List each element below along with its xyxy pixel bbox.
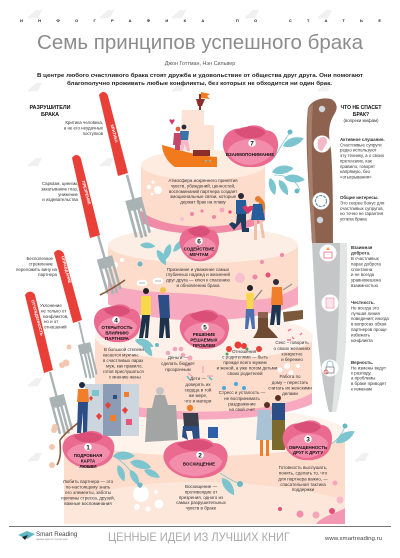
text: acceptance: держат брак на плаву <box>180 200 226 204</box>
decor: sex sticks <box>287 329 302 340</box>
text: mutual kindness: взаимностью <box>351 283 379 288</box>
text: influence: муж, как правило, <box>106 364 143 368</box>
text: stress: раздражение <box>228 402 256 406</box>
icon: lock <box>322 360 338 376</box>
heading: what will not save: ЧТО НЕ СПАСЕТ <box>341 105 381 111</box>
text: influence: касается мужчин: <box>103 352 139 358</box>
text: money: Деньги — <box>168 355 189 360</box>
intro text: благополучно проживать любые конфликты, без которых не обходится ни один брак. <box>67 80 333 87</box>
text: influence: с мнению жены <box>109 374 141 380</box>
couple with heart <box>229 193 265 240</box>
text: sex: Секс – говорить <box>275 340 309 345</box>
text: love map: его элементы, заботы <box>65 490 111 495</box>
text: stonewalling: не только от <box>41 308 66 314</box>
heading: what will not save <box>341 105 381 123</box>
flower 5: ПРОБЛЕМ <box>193 343 215 348</box>
text: children: же мере, <box>189 393 207 398</box>
flower 6 <box>180 225 219 261</box>
flower 1: ПОДРОБНАЯ <box>74 453 102 458</box>
text: defensiveness: переложить вину на <box>16 267 58 272</box>
branch: leaves right of flower 7 <box>267 130 305 197</box>
text: defensiveness: Бесполезное <box>27 256 54 261</box>
decor: parents flowers <box>226 342 262 356</box>
text: criticism: поступков <box>83 131 104 136</box>
text: love map: важные воспоминания <box>64 501 112 506</box>
flower 2: ВОСХИЩЕНИЕ <box>183 462 215 466</box>
footer logo: Smart Reading <box>36 531 78 538</box>
flower 1: КАРТА <box>81 458 96 464</box>
fork: оправдание: ОПРАВДАНИЕ <box>60 255 73 284</box>
text: dreams: и обновлению брака <box>176 283 220 288</box>
fork: презрение <box>72 155 123 296</box>
text: active listening: «отыгрывания» <box>340 174 372 180</box>
decor: children sticks <box>185 365 213 380</box>
flower 4 <box>94 304 141 342</box>
text: turning toward: для партнера важно, — <box>278 476 328 482</box>
text: stress: Стресс и усталость — <box>219 390 266 395</box>
text: fidelity: Не измены ведут <box>351 366 386 370</box>
text: criticism: Критика человека, <box>65 120 103 125</box>
text: active listening: эту технику, а о своих <box>340 153 385 158</box>
flower 6: МЕЧТАМ <box>190 252 209 257</box>
text: turning toward: Готовность выслушать, <box>279 465 327 470</box>
text: housework: дому – перестать <box>272 380 309 385</box>
cookies <box>49 344 72 468</box>
text: shared interests: счастливых супругов, <box>340 206 384 211</box>
text: mutual kindness: уравновешена <box>351 278 381 282</box>
authors: Джон Готтман, Нэн Сильвер <box>165 61 235 67</box>
tier: third <box>95 314 313 420</box>
text: dreams: друг друга — ключ к спасению <box>166 278 230 282</box>
text: sex: конкретно <box>282 352 303 356</box>
text: active listening: правило, говорят <box>340 164 375 169</box>
couple at flower 3 <box>256 395 285 456</box>
text: admiration: Восхищение — <box>185 484 217 489</box>
text: turning toward: понять, сделать то, что <box>279 470 328 476</box>
text: active listening: Счастливые супруги <box>340 142 382 148</box>
text: active listening: напрямую, без <box>340 169 370 174</box>
watermark marks <box>28 10 369 462</box>
knife handle <box>307 98 337 243</box>
text: contempt: Сарказм, цинизм, <box>42 181 78 186</box>
footer tagline: ЦЕННЫЕ ИДЕИ ИЗ ЛУЧШИХ КНИГ <box>108 530 290 544</box>
text: parents: и женой, а уже потом детьми <box>217 364 278 370</box>
branch: leaves near flower 2 <box>219 473 243 497</box>
flower 5 <box>180 310 229 349</box>
intro text <box>37 72 363 87</box>
sculptor with statue <box>145 387 218 444</box>
flower 2: 2 <box>198 452 202 460</box>
text: love map: по-настоящему знать <box>66 484 111 490</box>
flower 7: 7 <box>250 140 254 148</box>
text: mutual kindness: Взаимная <box>351 245 373 250</box>
text: influence: готов прислушаться <box>103 369 144 374</box>
text: active listening: претензиях, как <box>340 158 372 164</box>
text: acceptance: воспоминаний партнера создает <box>169 188 237 194</box>
text: mutual kindness: В счастливых <box>351 256 380 261</box>
fork: отчужденность: ОТЧУЖДЕННОСТЬ <box>30 299 45 336</box>
text: influence: в счастливых парах <box>103 358 144 363</box>
text: parents: своих родителей <box>227 370 263 376</box>
text: sex: о своих желаниях <box>273 346 311 351</box>
icon: document <box>322 294 338 312</box>
flower 1: ЛЮБВИ <box>79 464 97 469</box>
text: stonewalling: Уклонение <box>40 303 62 308</box>
icon: gift <box>320 244 336 262</box>
text: turning toward: спасательная тактика <box>280 482 326 487</box>
text: money: сделать бюджет <box>161 361 195 366</box>
text: honesty: избежать <box>351 332 371 338</box>
text: fidelity: Верность. <box>351 360 373 365</box>
text: children: Дети — <box>190 376 206 381</box>
text: acceptance: эмоциональные связи, которые <box>170 194 237 199</box>
text: contempt: закатывание глаз, <box>41 186 78 192</box>
flower 5: РЕШАЕМЫХ <box>190 338 218 342</box>
text: housework: делами <box>282 391 298 396</box>
text: housework: Работа по <box>279 374 301 379</box>
text: stress: не воспринимать <box>224 396 260 401</box>
icon: clock puzzle <box>312 192 330 210</box>
flower 4: 4 <box>114 318 118 324</box>
flower 3: 3 <box>306 436 310 444</box>
text: defensiveness: стремление <box>29 262 54 266</box>
flower 4: ОТКРЫТОСТЬ <box>102 325 132 330</box>
woman with axe, stump, logs <box>245 279 303 338</box>
flower 5: 5 <box>203 324 207 332</box>
text: fidelity: к изменам <box>351 386 372 392</box>
heading: destroyers: РАЗРУШИТЕЛИ <box>29 105 71 111</box>
decor: money dots <box>166 347 192 360</box>
text: active listening: Активное слушание. <box>340 137 385 142</box>
flower 1: 1 <box>86 444 90 452</box>
flower 3: ОБРАЩЕННОСТЬ <box>289 445 327 450</box>
text: honesty: Честность. <box>351 300 375 305</box>
text: sex: и бережно <box>281 357 303 362</box>
text: defensiveness: партнера <box>38 272 58 277</box>
fork: критика <box>99 92 152 240</box>
text: stonewalling: но и от <box>44 319 58 324</box>
tier: second <box>108 227 298 320</box>
text: contempt: и издевательства <box>42 197 79 202</box>
flower 4: ВЛИЯНИЮ <box>105 330 129 336</box>
text: admiration: презрения, одного из <box>179 495 223 500</box>
text: acceptance: Атмосфера искреннего принятия <box>168 178 238 183</box>
text: shared interests: но точно не гарантия <box>340 211 384 216</box>
text: criticism: а не его неудачных <box>64 126 104 130</box>
text: admiration: самых разрушительных <box>176 500 227 505</box>
heading: destroyers <box>29 105 71 118</box>
text: dreams: Признание и уважение самых <box>167 267 230 272</box>
title: Семь принципов успешного брака <box>37 32 364 54</box>
text: fidelity: в браке приводят <box>351 381 386 386</box>
text: mutual kindness: доброта. <box>351 250 370 256</box>
text: fidelity: а проблемы <box>351 376 375 380</box>
intro text: В центре любого счастливого брака стоят дружба и удовольствие от общества друг друга. Они помогают <box>37 72 363 79</box>
flower 6: 6 <box>197 238 201 246</box>
branch: leaves near flower 6 <box>138 238 185 267</box>
dry branch <box>57 280 125 465</box>
fork: оправдание <box>54 250 98 380</box>
fork: критика: КРИТИКА <box>110 124 119 143</box>
flower 1 <box>63 431 114 469</box>
text: dreams: глубинных надежд и жизненей <box>166 271 231 277</box>
text: mutual kindness: парах доброта <box>351 262 381 266</box>
heading: what will not save: БРАК? <box>353 112 369 118</box>
text: mutual kindness: спонтанна <box>351 267 373 272</box>
text: stonewalling: отношений <box>44 324 67 330</box>
text: stress: на свой счет <box>229 406 255 412</box>
text: shared interests: успеха брака <box>340 216 367 222</box>
text: influence: В большой степени <box>104 347 144 352</box>
text: honesty: Не всегда это <box>351 306 379 310</box>
text: money: прозрачным <box>165 367 191 372</box>
branch: leaves near flower 4 <box>134 336 159 358</box>
text: children: что и матери <box>185 398 212 404</box>
footer url: www.smartreading.ru <box>324 536 382 542</box>
text: children: сердца в той <box>185 386 212 392</box>
text: parents: Отношения <box>232 349 257 354</box>
flower 7: ВЗАИМОПОНИМАНИЕ <box>226 152 274 157</box>
branch: leaves near flower 1 <box>113 452 161 488</box>
flower 2 <box>163 438 228 478</box>
footer rule <box>9 526 391 527</box>
flower 4: ПАРТНЕРА <box>105 336 130 341</box>
cake <box>63 150 345 524</box>
heading: what will not save: (вопреки мифам) <box>343 118 379 123</box>
text: shared interests: Это скорее бонус для <box>340 200 385 206</box>
couple on the ship <box>169 119 190 151</box>
couple talking with speech bubbles <box>136 278 170 338</box>
footer logo: ценные идеи из лучших книг <box>36 538 68 541</box>
flower 3: ДРУГ К ДРУГУ <box>293 450 323 455</box>
text: acceptance: чувств, убеждений, ценностей, <box>171 182 235 188</box>
branch: leaves near flower 3 <box>330 424 357 446</box>
text: honesty: поведения; иногда <box>351 316 389 321</box>
text: mutual kindness: и не всегда <box>351 272 375 277</box>
text: turning toward: поддержки <box>292 487 315 492</box>
flower 6: СОДЕЙСТВИЕ <box>184 246 214 252</box>
decor: stress dots <box>222 382 246 390</box>
fork: отчужденность <box>25 292 74 436</box>
text: active listening: редко используют <box>340 148 377 152</box>
text: honesty: в вопросах обхая <box>351 322 387 326</box>
text: housework: считать их женскими <box>268 386 312 390</box>
tier: bottom <box>63 408 345 524</box>
text: love map: причины стресса, друзей, <box>61 494 115 500</box>
text: parents: с родителями — быть <box>222 354 269 360</box>
tier: top <box>141 150 265 234</box>
text: shared interests: Общие интересы. <box>340 195 379 200</box>
text: honesty: партнеров проще <box>351 327 387 332</box>
flower 5: РЕШЕНИЕ <box>193 332 215 337</box>
knife <box>307 98 347 412</box>
text: children: доверять их <box>185 382 211 387</box>
woman with love map board <box>77 382 139 436</box>
ship illustration <box>162 92 217 167</box>
flower 7 <box>223 125 278 167</box>
heading: destroyers: БРАКА <box>41 112 59 118</box>
text: contempt: унижение <box>58 192 79 197</box>
flower 3 <box>283 420 332 460</box>
text: love map: Любить партнера — это <box>63 479 114 484</box>
icon: ear <box>314 136 330 152</box>
text: parents: прежде всего мужем <box>223 360 267 365</box>
header label: ИНФОГРАФИКА ПО СТАТЬЕ <box>20 18 381 23</box>
text: honesty: конфликта <box>351 338 373 343</box>
text: fidelity: к разладу, <box>351 370 372 376</box>
text: stonewalling: конфликтов, <box>43 314 68 319</box>
text: honesty: лучшая линия <box>351 311 380 316</box>
knife blade <box>312 243 347 412</box>
text: admiration: противоядие от <box>185 490 217 494</box>
fork: презрение: ПРЕЗРЕНИЕ <box>81 180 92 205</box>
footer logo <box>18 531 78 541</box>
text: admiration: чувств в браке <box>186 506 217 510</box>
